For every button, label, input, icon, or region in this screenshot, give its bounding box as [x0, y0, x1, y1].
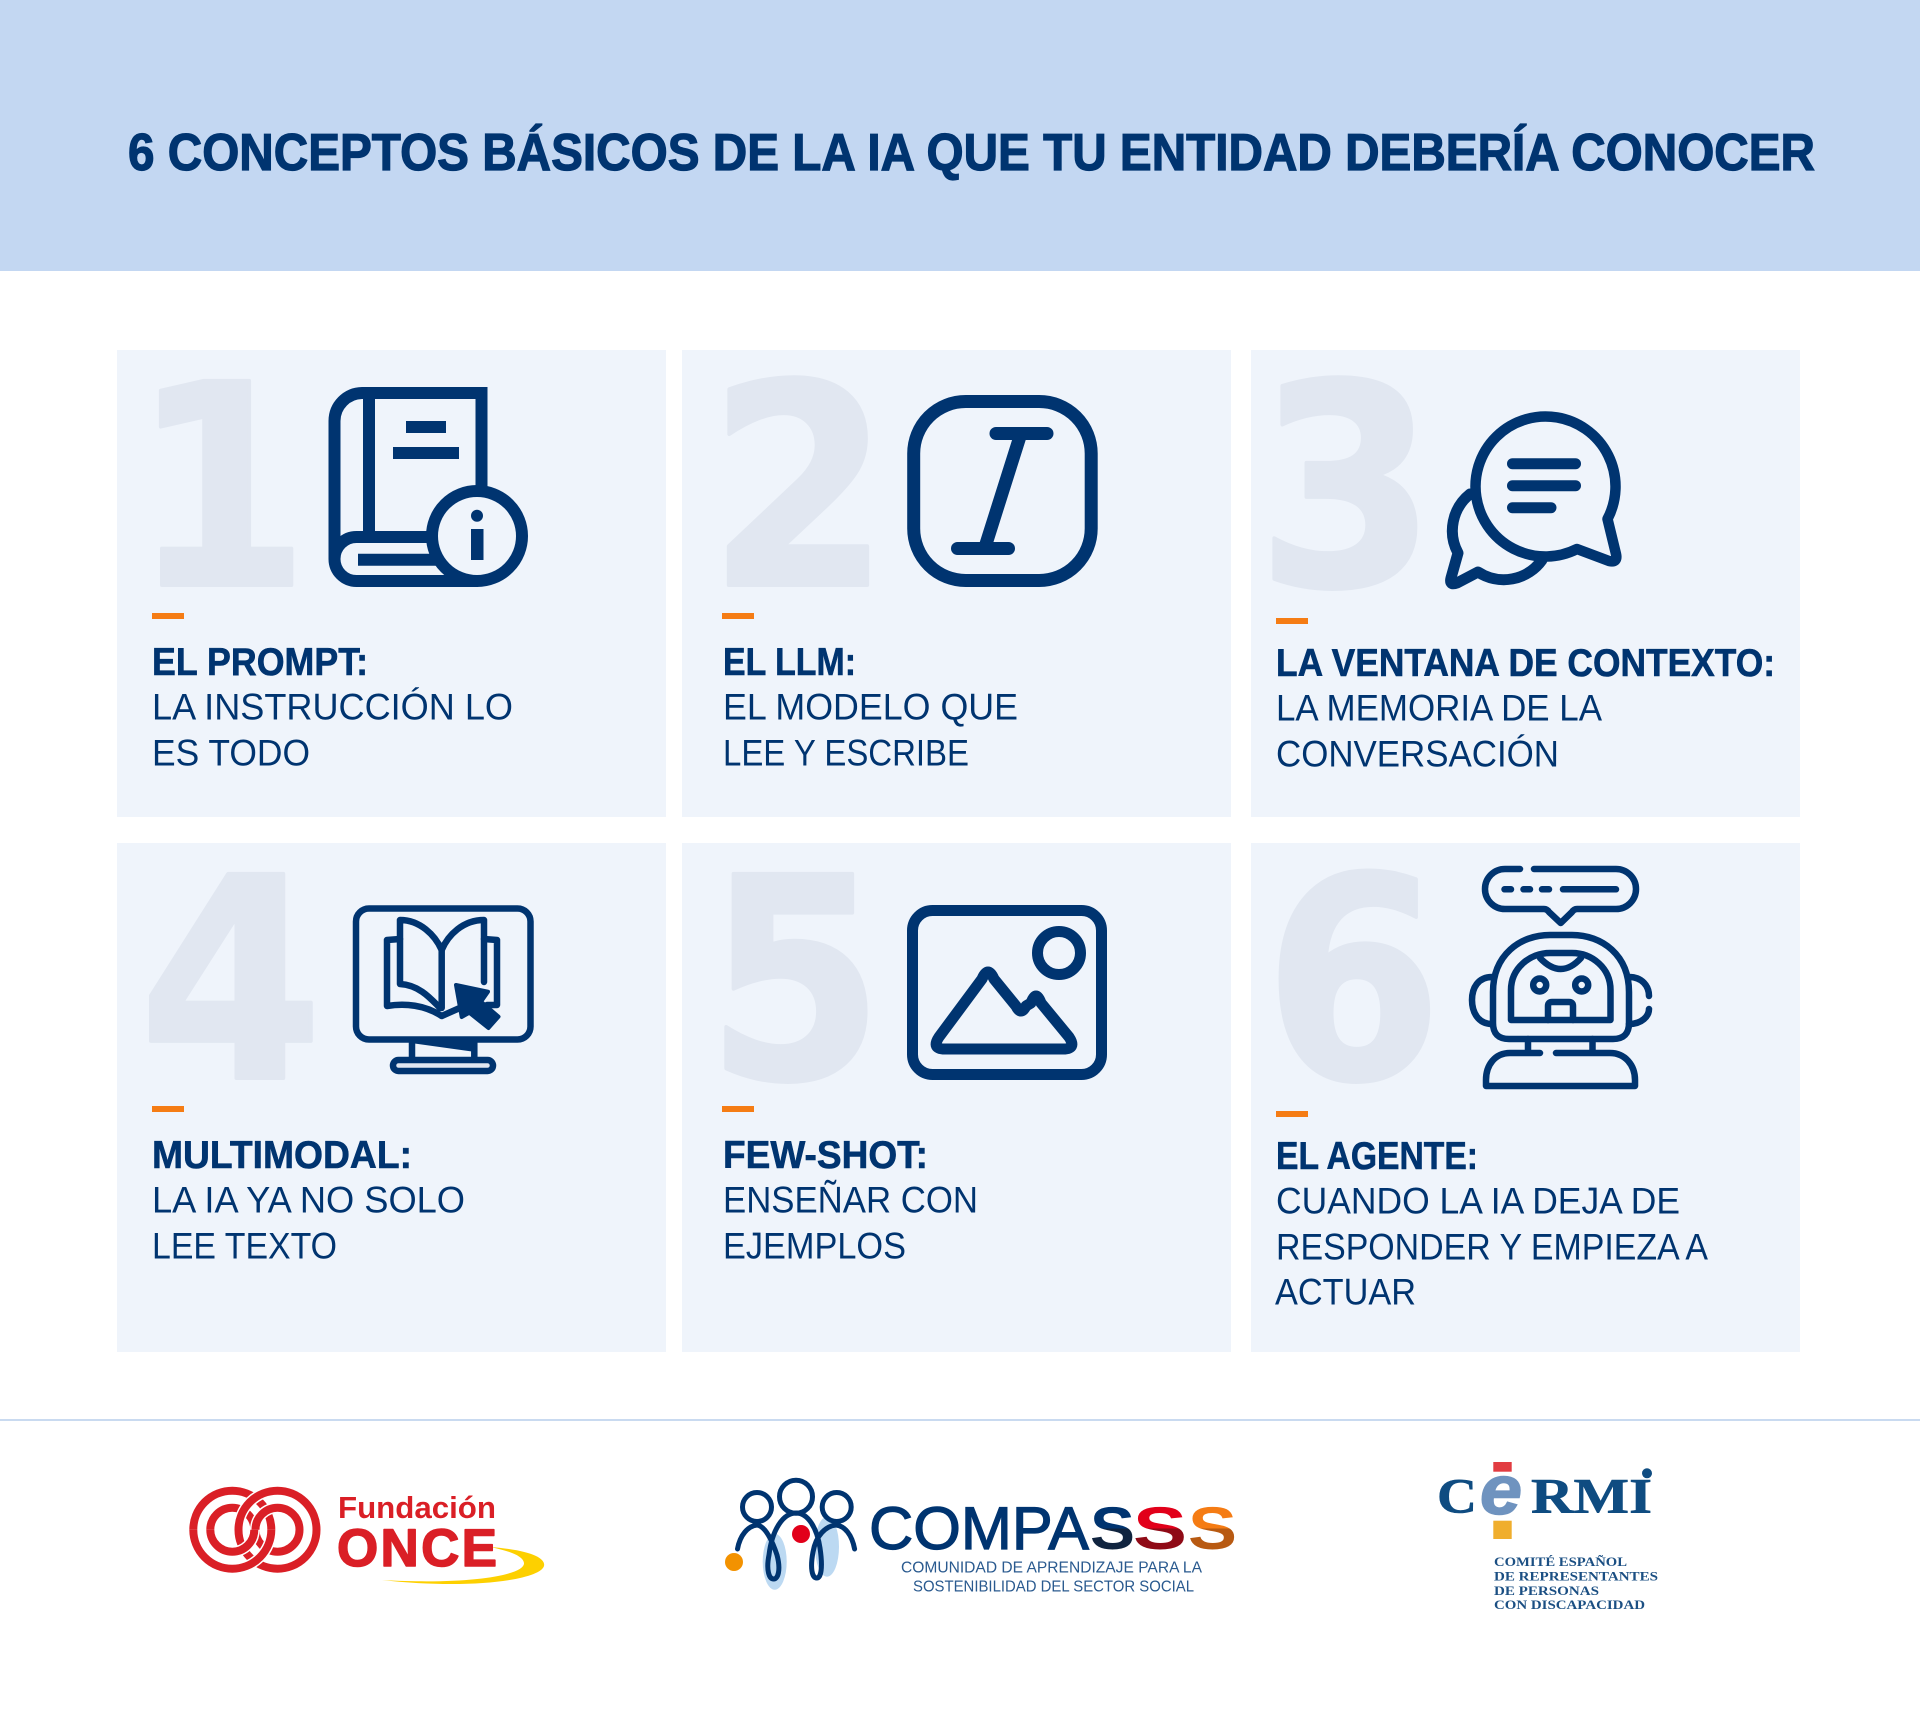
text: el prompt: EL PROMPT:: [152, 641, 368, 684]
logo: CERMI: COMITÉ ESPAÑOL: [1494, 1554, 1627, 1569]
number 4: 4: [139, 819, 323, 1145]
text: multimodal: MULTIMODAL:: [152, 1134, 412, 1177]
text: el agente: EL AGENTE:: [1276, 1135, 1478, 1178]
logo: CERMI: RMI: [1531, 1467, 1652, 1523]
logo: CERMI: [1437, 1451, 1658, 1612]
text: la ventana de contexto: LA MEMORIA DE LA: [1276, 688, 1602, 729]
icon: image: [912, 910, 1102, 1074]
text: el llm: EL LLM:: [723, 641, 856, 684]
text: el llm: [723, 641, 1018, 774]
logo: Fundación ONCE: [193, 1490, 544, 1584]
logo: CERMI: C: [1437, 1468, 1477, 1524]
logo: Fundación ONCE: Fundación: [338, 1490, 496, 1525]
text: el agente: [1275, 1135, 1708, 1313]
accent bar: [152, 1106, 184, 1112]
icon: chat bubbles: [1451, 416, 1616, 584]
accent bar: [1276, 618, 1308, 624]
logo: CERMI: e: [1480, 1451, 1522, 1529]
text: el agente: ACTUAR: [1275, 1272, 1416, 1313]
icon: monitor with book and cursor: [356, 908, 530, 1071]
logo: COMPASSS: S: [1090, 1495, 1135, 1562]
text: la ventana de contexto: LA VENTANA DE CONTEXTO:: [1276, 642, 1775, 685]
text: el agente: RESPONDER Y EMPIEZA A: [1276, 1226, 1708, 1268]
text: el llm: LEE Y ESCRIBE: [723, 732, 969, 774]
text: multimodal: LA IA YA NO SOLO: [152, 1180, 465, 1220]
text: multimodal: [152, 1134, 465, 1266]
logo: COMPASSS: S: [1188, 1495, 1237, 1562]
number 6: 6: [1265, 819, 1442, 1145]
logo: COMPASSS: S: [1133, 1495, 1187, 1562]
accent bar: [152, 613, 184, 619]
logo: CERMI: CON DISCAPACIDAD: [1494, 1597, 1645, 1612]
panel: few-shot: [682, 819, 1231, 1352]
accent bar: [722, 1106, 754, 1112]
text: multimodal: LEE TEXTO: [152, 1226, 337, 1266]
panel: la ventana de contexto: [1251, 326, 1800, 817]
logo: Fundación ONCE: ONCE: [337, 1519, 497, 1578]
text: el prompt: LA INSTRUCCIÓN LO: [152, 686, 513, 728]
logo: COMPASSS: COMUNIDAD DE APRENDIZAJE PARA LA: [901, 1560, 1202, 1577]
title: 6 CONCEPTOS BÁSICOS DE LA IA QUE TU ENTIDAD DEBERÍA CONOCER: [128, 124, 1815, 182]
text: el prompt: ES TODO: [152, 732, 310, 774]
text: el agente: CUANDO LA IA DEJA DE: [1276, 1180, 1680, 1222]
panel: multimodal: [117, 819, 666, 1352]
logo: COMPASSS: SOSTENIBILIDAD DEL SECTOR SOCIAL: [913, 1579, 1194, 1596]
logo: COMPASSS: [725, 1480, 1237, 1596]
number 3: 3: [1257, 326, 1436, 652]
icon: robot with speech bubble: [1472, 869, 1649, 1086]
logo: COMPASSS: COMPA: [869, 1495, 1089, 1562]
logo: CERMI: DE PERSONAS: [1494, 1583, 1599, 1598]
accent bar: [722, 613, 754, 619]
icon: book with info: [334, 393, 522, 581]
text: el prompt: [152, 641, 513, 774]
panel: el agente: [1251, 819, 1800, 1352]
text: la ventana de contexto: [1276, 642, 1775, 775]
accent bar: [1276, 1111, 1308, 1117]
text: few-shot: EJEMPLOS: [723, 1226, 906, 1266]
number 5: 5: [706, 819, 884, 1145]
text: el llm: EL MODELO QUE: [723, 686, 1018, 728]
number 2: 2: [708, 326, 890, 652]
panel: el llm: [682, 326, 1231, 817]
text: few-shot: [723, 1134, 978, 1266]
text: la ventana de contexto: CONVERSACIÓN: [1276, 734, 1559, 775]
panel: el prompt: [117, 326, 666, 817]
number 1: 1: [132, 326, 309, 652]
text: few-shot: ENSEÑAR CON: [723, 1180, 978, 1220]
icon: text cursor: [914, 402, 1091, 580]
header band: [0, 0, 1920, 271]
text: few-shot: FEW-SHOT:: [723, 1134, 928, 1177]
logo: CERMI: DE REPRESENTANTES: [1494, 1568, 1658, 1583]
